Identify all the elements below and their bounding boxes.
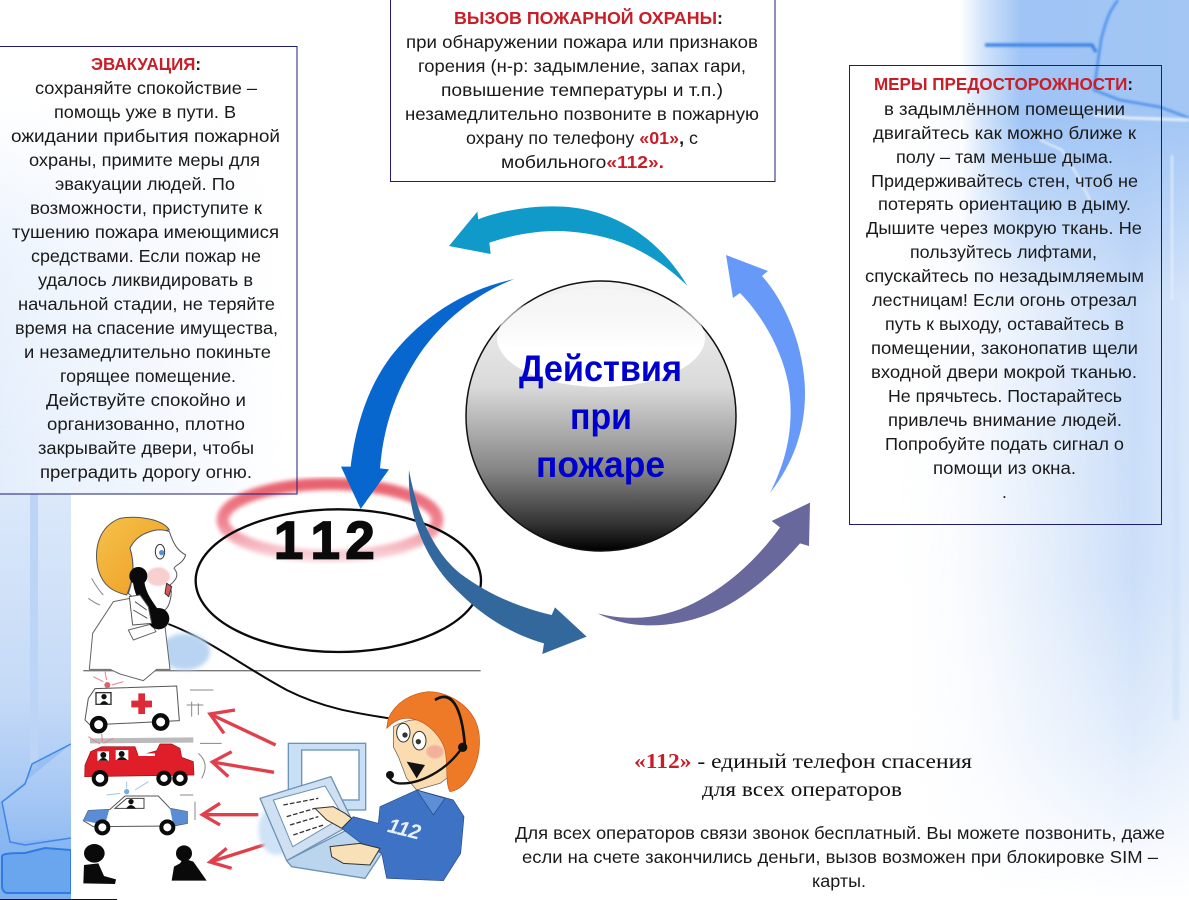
text block: free call note: карты. <box>812 871 866 891</box>
precautions text: Попробуйте подать сигнал о <box>885 434 1124 454</box>
call instructions text <box>405 32 759 172</box>
cord <box>168 624 389 718</box>
text block: free call note <box>515 823 1165 891</box>
heading: precautions: МЕРЫ ПРЕДОСТОРОЖНОСТИ: <box>874 74 1133 94</box>
precautions text: спускайтесь по незадымляемым <box>865 266 1144 286</box>
evacuation text: организованно, плотно <box>47 414 245 434</box>
centre title <box>519 348 682 485</box>
cycle arrows <box>341 206 810 654</box>
people silhouettes <box>83 844 207 884</box>
evacuation text: начальной стадии, не теряйте <box>18 294 275 314</box>
heading: 112 rescue phone: «112» - единый телефон спасения <box>634 749 972 773</box>
precautions text: Дышите через мокрую ткань. Не <box>866 218 1142 238</box>
call instructions text: повышение температуры и т.п.) <box>441 80 723 100</box>
text block: free call note: если на счете закончились деньги, вызов возможен при блокировке SIM – <box>522 847 1158 867</box>
number 112: 112 <box>274 512 375 571</box>
arrow: blue <box>341 279 514 509</box>
evacuation text: средствами. Если пожар не <box>31 246 261 266</box>
evacuation text: сохраняйте спокойствие – <box>35 78 257 98</box>
black oval outline <box>196 509 481 652</box>
evacuation text: горящее помещение. <box>60 366 236 386</box>
centre title: пожаре <box>536 444 665 485</box>
panel: evacuation <box>0 46 297 494</box>
arrow: light blue <box>726 255 805 493</box>
red ring around number <box>223 484 437 556</box>
evacuation text: эвакуации людей. По <box>55 174 235 194</box>
evacuation text: время на спасение имущества, <box>15 318 278 338</box>
arrow: steel blue <box>409 470 587 654</box>
centre title: при <box>570 396 632 437</box>
fire engine <box>85 733 222 785</box>
precautions text: двигайтесь как можно ближе к <box>873 123 1136 143</box>
precautions text: входной двери мокрой тканью. <box>871 362 1137 382</box>
operator: 112 <box>385 814 423 845</box>
evacuation text: преградить дорогу огню. <box>40 462 252 482</box>
panel: precautions <box>850 66 1162 524</box>
evacuation text: тушению пожара имеющимися <box>12 222 279 242</box>
precautions text <box>865 99 1144 502</box>
centre title: Действия <box>519 348 682 389</box>
divider <box>83 669 481 673</box>
precautions text: потерять ориентацию в дыму. <box>878 194 1131 214</box>
precautions text: привлечь внимание людей. <box>888 410 1122 430</box>
arrow: purple <box>598 503 810 625</box>
precautions text: Не прячьтесь. Постарайтесь <box>888 386 1122 406</box>
arrow: teal <box>449 206 687 286</box>
police car <box>83 782 195 833</box>
precautions text: . <box>1002 482 1007 502</box>
precautions text: путь к выходу, оставайтесь в <box>885 314 1124 334</box>
evacuation text: Действуйте спокойно и <box>46 390 246 410</box>
evacuation text: помощь уже в пути. В <box>54 102 236 122</box>
heading: call fire service: ВЫЗОВ ПОЖАРНОЙ ОХРАНЫ : <box>454 7 723 28</box>
sphere highlight <box>497 289 705 387</box>
operator <box>258 692 480 881</box>
man on phone <box>88 517 210 681</box>
evacuation text: возможности, приступите к <box>30 198 262 218</box>
precautions text: полу – там меньше дыма. <box>896 147 1113 167</box>
call instructions text: мобильного «112». <box>501 152 664 172</box>
evacuation text: охраны, примите меры для <box>29 150 260 170</box>
monitor <box>288 743 366 810</box>
precautions text: помещении, законопатив щели <box>871 338 1138 358</box>
call instructions text: горения (н-р: задымление, запах гари, <box>418 56 746 76</box>
panel: call fire service <box>390 0 775 182</box>
precautions text: пользуйтесь лифтами, <box>910 242 1097 262</box>
precautions text: Придерживайтесь стен, чтоб не <box>871 171 1138 191</box>
heading: 112 rescue phone: для всех операторов <box>702 777 902 801</box>
evacuation text <box>11 78 280 482</box>
heading: evacuation: ЭВАКУАЦИЯ: <box>91 54 201 74</box>
precautions text: в задымлённом помещении <box>884 99 1125 119</box>
call instructions text: при обнаружении пожара или признаков <box>406 32 758 52</box>
call instructions text: охрану по телефону «01», с <box>466 128 698 148</box>
ambulance <box>85 672 213 731</box>
centre sphere <box>466 281 736 551</box>
precautions text: помощи из окна. <box>933 458 1076 478</box>
call instructions text: незамедлительно позвоните в пожарную <box>405 104 759 124</box>
precautions text: лестницам! Если огонь отрезал <box>872 290 1137 310</box>
illustration: emergency call 112 <box>71 484 491 900</box>
evacuation text: удалось ликвидировать в <box>38 270 253 290</box>
evacuation text: ожидании прибытия пожарной <box>11 126 280 146</box>
red arrows <box>202 710 276 868</box>
background: left column <box>0 494 71 900</box>
heading: 112 rescue phone <box>634 749 972 801</box>
text block: free call note: Для всех операторов связи звонок бесплатный. Вы можете позвонить, даже <box>515 823 1165 843</box>
evacuation text: закрывайте двери, чтобы <box>38 438 254 458</box>
evacuation text: и незамедлительно покиньте <box>24 342 271 362</box>
